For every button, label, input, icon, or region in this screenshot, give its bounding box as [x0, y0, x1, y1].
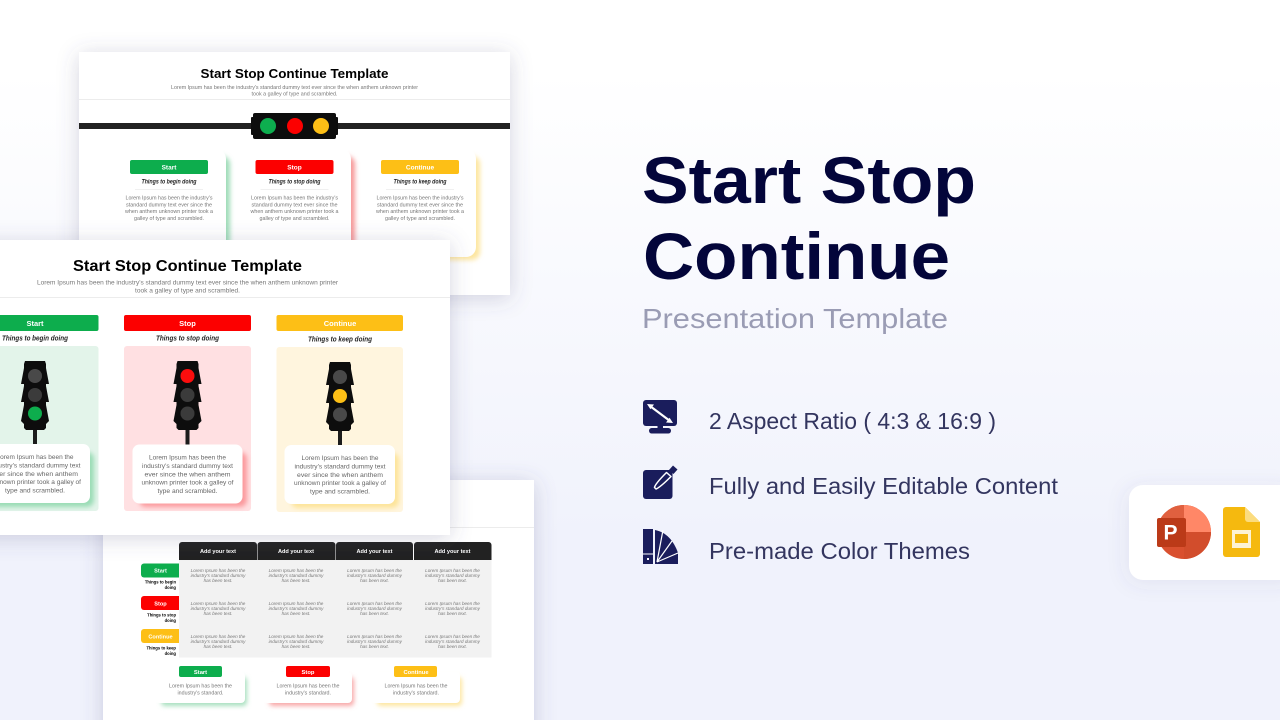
- text box: start: [0, 444, 94, 507]
- row: stop: [141, 596, 481, 623]
- row: start: Start: [154, 568, 167, 574]
- feature: editable content: [643, 466, 1059, 499]
- row: start: Lorem Ipsum has been the: [425, 568, 480, 573]
- row: stop: industry's standard dummy: [347, 606, 403, 611]
- row: start: industry's standard dummy: [347, 573, 403, 578]
- panel: app icons: [1129, 485, 1280, 580]
- row: continue: doing: [165, 651, 176, 656]
- panel: slide three with table: [103, 480, 534, 720]
- text box: continue: [284, 445, 399, 508]
- row: start: Lorem Ipsum has been the: [191, 568, 246, 573]
- card: continue: standard dummy text ever since the: [377, 202, 463, 208]
- card: start: Things to begin doing: [142, 180, 197, 186]
- row: start: Lorem Ipsum has been the: [269, 568, 324, 573]
- row: stop: has been text.: [204, 611, 232, 616]
- card: start: when anthem unknown printer took a: [125, 209, 213, 215]
- column: start: [0, 315, 98, 511]
- row: start: has been text.: [282, 578, 310, 583]
- column: start: Things to begin doing: [2, 336, 69, 342]
- text box: stop: industry's standard dummy text: [142, 463, 233, 470]
- row: continue: Lorem Ipsum has been the: [347, 634, 402, 639]
- main title: [642, 143, 976, 293]
- row: start: doing: [165, 585, 176, 590]
- card: start: Lorem Ipsum has been the industry's: [126, 196, 213, 202]
- icon: monitor with diagonal arrow: [643, 400, 677, 434]
- panel: slide one with horizontal signal: [79, 52, 510, 295]
- summary card: continue: Lorem Ipsum has been the: [384, 684, 448, 690]
- column: start: Start: [26, 319, 44, 328]
- row: start: Things to begin: [145, 580, 176, 584]
- row: continue: has been text.: [360, 644, 389, 649]
- row: stop: industry's standard dummy: [425, 606, 481, 611]
- summary card: start: industry's standard.: [178, 690, 224, 696]
- row: continue: has been text.: [438, 644, 467, 649]
- slide two subtitle: Lorem Ipsum has been the industry's standard dummy text ever since the when anthem unknown printer: [37, 280, 338, 286]
- column: stop: Things to stop doing: [156, 336, 220, 342]
- text box: stop: type and scrambled.: [158, 488, 218, 495]
- card: continue: Things to keep doing: [394, 180, 447, 186]
- text box: stop: Lorem Ipsum has been the: [149, 455, 226, 462]
- table: Add your text: [200, 549, 236, 555]
- summary card: continue: [371, 666, 462, 706]
- summary card: stop: Stop: [302, 670, 315, 676]
- row: start: [141, 564, 481, 590]
- summary card: continue: industry's standard.: [393, 690, 439, 696]
- summary card: continue: Continue: [403, 670, 429, 676]
- row: stop: has been text.: [282, 611, 310, 616]
- summary card: stop: [263, 666, 354, 706]
- summary card: start: [155, 666, 247, 706]
- summary card: stop: industry's standard.: [285, 690, 331, 696]
- slide two subtitle: took a galley of type and scrambled.: [135, 289, 240, 295]
- table: Add your text: [434, 549, 471, 555]
- row: start: has been text.: [438, 578, 467, 583]
- card: stop: when anthem unknown printer took a: [250, 209, 339, 215]
- row: continue: has been text.: [282, 644, 310, 649]
- feature: aspect ratio: [643, 400, 996, 434]
- row: continue: Lorem Ipsum has been the: [425, 634, 480, 639]
- row: continue: Lorem Ipsum has been the: [269, 634, 324, 639]
- row: stop: Stop: [154, 602, 167, 608]
- row: stop: industry's standard dummy: [269, 606, 324, 611]
- slide one subtitle: took a galley of type and scrambled.: [252, 91, 338, 97]
- text box: continue: ever since the when anthem: [297, 472, 384, 479]
- row: continue: industry's standard dummy: [191, 639, 246, 644]
- icon: PowerPoint: [1157, 505, 1211, 559]
- column: stop: [124, 315, 251, 511]
- card: stop: Lorem Ipsum has been the industry's: [251, 196, 339, 202]
- column: continue: Continue: [324, 319, 356, 328]
- subtitle: Presentation Template: [642, 303, 948, 334]
- icon: pen on square: [643, 466, 678, 499]
- icon: traffic light yellow: [326, 362, 354, 446]
- table: Add your text: [278, 549, 314, 555]
- row: continue: industry's standard dummy: [347, 639, 403, 644]
- text box: continue: Lorem Ipsum has been the: [302, 455, 379, 462]
- row: continue: [141, 629, 481, 656]
- row: stop: doing: [165, 618, 176, 623]
- text box: continue: type and scrambled.: [310, 488, 370, 496]
- text box: continue: industry's standard dummy text: [294, 464, 386, 470]
- row: start: industry's standard dummy: [269, 573, 324, 578]
- row: start: industry's standard dummy: [425, 573, 481, 578]
- text box: continue: unknown printer took a galley of: [294, 480, 386, 487]
- card: continue: Continue: [406, 164, 434, 172]
- main title: Continue: [643, 219, 950, 293]
- row: stop: industry's standard dummy: [191, 606, 246, 611]
- horizontal traffic signal: [79, 113, 510, 139]
- card: continue: when anthem unknown printer took a: [376, 209, 464, 215]
- text box: stop: unknown printer took a galley of: [142, 480, 234, 487]
- table: Add your text: [356, 549, 393, 555]
- feature: aspect ratio: 2 Aspect Ratio ( 4:3 & 16:9 ): [709, 408, 996, 434]
- slide two subtitle: [37, 280, 338, 295]
- slide two title: Start Stop Continue Template: [73, 258, 302, 275]
- row: start: industry's standard dummy: [191, 573, 246, 578]
- card: start: standard dummy text ever since the: [126, 202, 212, 208]
- column: continue: [276, 315, 403, 512]
- text box: start: type and scrambled.: [5, 488, 65, 495]
- row: stop: Things to stop: [147, 612, 176, 618]
- card: stop: Things to stop doing: [268, 180, 321, 186]
- icon: PowerPoint: P: [1163, 522, 1178, 544]
- row: start: Lorem Ipsum has been the: [347, 568, 402, 573]
- row: continue: industry's standard dummy: [269, 639, 324, 644]
- summary card: stop: Lorem Ipsum has been the: [276, 684, 340, 690]
- column: stop: Stop: [179, 319, 196, 328]
- icon: Google Slides: [1223, 507, 1260, 557]
- main title: Start Stop: [642, 143, 976, 217]
- card: continue: [363, 149, 480, 260]
- card: stop: galley of type and scrambled.: [260, 216, 330, 222]
- card: stop: standard dummy text ever since the: [252, 202, 338, 208]
- card: continue: Lorem Ipsum has been the industry's: [376, 196, 464, 202]
- row: stop: has been text.: [438, 611, 467, 616]
- summary card: start: Start: [194, 670, 207, 676]
- icon: traffic light green: [21, 361, 49, 445]
- row: start: has been text.: [204, 578, 232, 583]
- card: start: galley of type and scrambled.: [134, 216, 204, 222]
- row: stop: has been text.: [360, 611, 389, 616]
- row: stop: Lorem Ipsum has been the: [269, 601, 324, 606]
- slide one subtitle: [171, 85, 418, 97]
- row: continue: has been text.: [204, 644, 232, 649]
- card: start: [113, 149, 230, 258]
- row: continue: Lorem Ipsum has been the: [191, 634, 246, 639]
- panel: slide two with vertical traffic lights: [0, 240, 450, 535]
- table: [141, 542, 492, 658]
- summary card: start: Lorem Ipsum has been the: [169, 684, 232, 690]
- card: start: Start: [162, 164, 177, 172]
- row: continue: Continue: [148, 634, 173, 640]
- text box: stop: [132, 444, 247, 507]
- slide one title: Start Stop Continue Template: [200, 66, 388, 81]
- card: stop: [238, 149, 355, 258]
- feature: colour themes: [643, 529, 970, 564]
- card: continue: galley of type and scrambled.: [385, 216, 455, 222]
- slide one subtitle: Lorem Ipsum has been the industry's standard dummy text ever since the when anthem unknown printer: [171, 85, 418, 91]
- text box: stop: ever since the when anthem: [144, 471, 231, 478]
- feature: colour themes: Pre-made Color Themes: [709, 538, 970, 564]
- column: continue: Things to keep doing: [308, 336, 373, 344]
- card: stop: Stop: [287, 164, 302, 172]
- row: continue: Things to keep: [146, 646, 176, 650]
- icon: colour fan: [643, 529, 678, 564]
- icon: traffic light red: [174, 361, 202, 445]
- row: start: has been text.: [360, 578, 389, 583]
- feature: editable content: Fully and Easily Editable Content: [709, 473, 1059, 499]
- row: stop: Lorem Ipsum has been the: [347, 601, 402, 606]
- row: stop: Lorem Ipsum has been the: [425, 601, 480, 606]
- row: continue: industry's standard dummy: [425, 639, 481, 644]
- row: stop: Lorem Ipsum has been the: [191, 601, 246, 606]
